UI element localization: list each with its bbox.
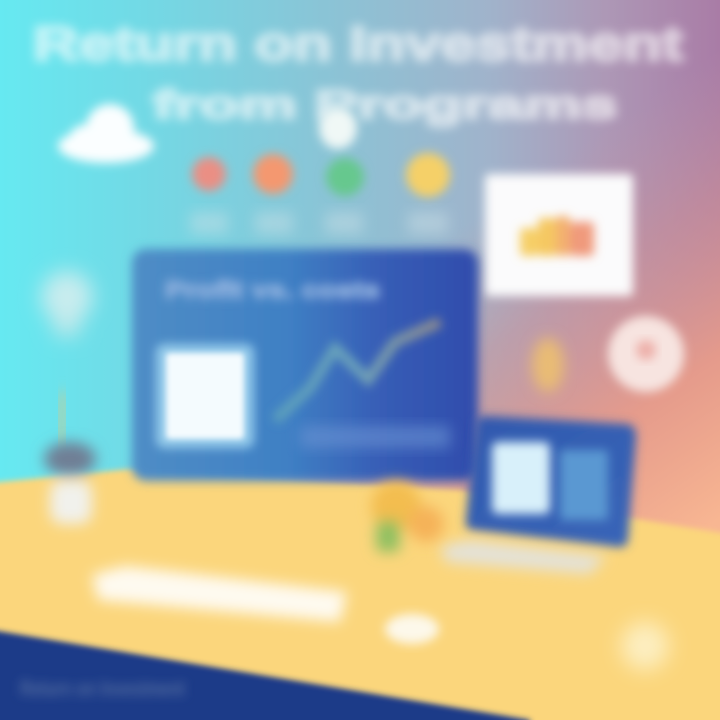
icon: orange dot	[253, 154, 293, 194]
monitor document	[166, 353, 244, 439]
dot captions	[190, 212, 448, 234]
mouse	[385, 614, 439, 644]
icon: cloud	[58, 104, 154, 163]
icon: yellow dot	[406, 153, 450, 197]
icon: lightbulb	[41, 271, 93, 336]
icon: white sparkle	[319, 107, 357, 149]
icon: red dot	[192, 157, 226, 191]
monitor heading: Profit vs. costs	[165, 277, 380, 304]
panel: laptop	[466, 416, 636, 547]
keyboard	[92, 566, 347, 622]
icon: cup	[44, 442, 96, 524]
laptop document	[492, 442, 550, 514]
bottom banner	[0, 628, 530, 720]
bar chart	[520, 216, 594, 256]
desk	[0, 469, 720, 720]
monitor lower text	[300, 426, 450, 448]
line chart	[275, 322, 440, 420]
icon: bulb on desk	[621, 622, 669, 670]
status dots row	[192, 153, 450, 197]
icon: target badge	[608, 316, 684, 392]
title: Return on Investment	[33, 18, 683, 71]
laptop chart	[560, 450, 608, 520]
plant stem	[60, 392, 64, 445]
banner text: Return on Investment	[20, 676, 185, 701]
panel: monitor	[132, 249, 478, 481]
icon: coin	[532, 338, 564, 392]
title: from Programs	[152, 83, 618, 127]
laptop base	[440, 540, 606, 574]
title	[33, 18, 683, 127]
icon: green dot	[326, 158, 364, 196]
monitor document halo	[156, 344, 254, 448]
panel: chart card	[485, 174, 633, 296]
icon: potted plant	[371, 481, 444, 552]
